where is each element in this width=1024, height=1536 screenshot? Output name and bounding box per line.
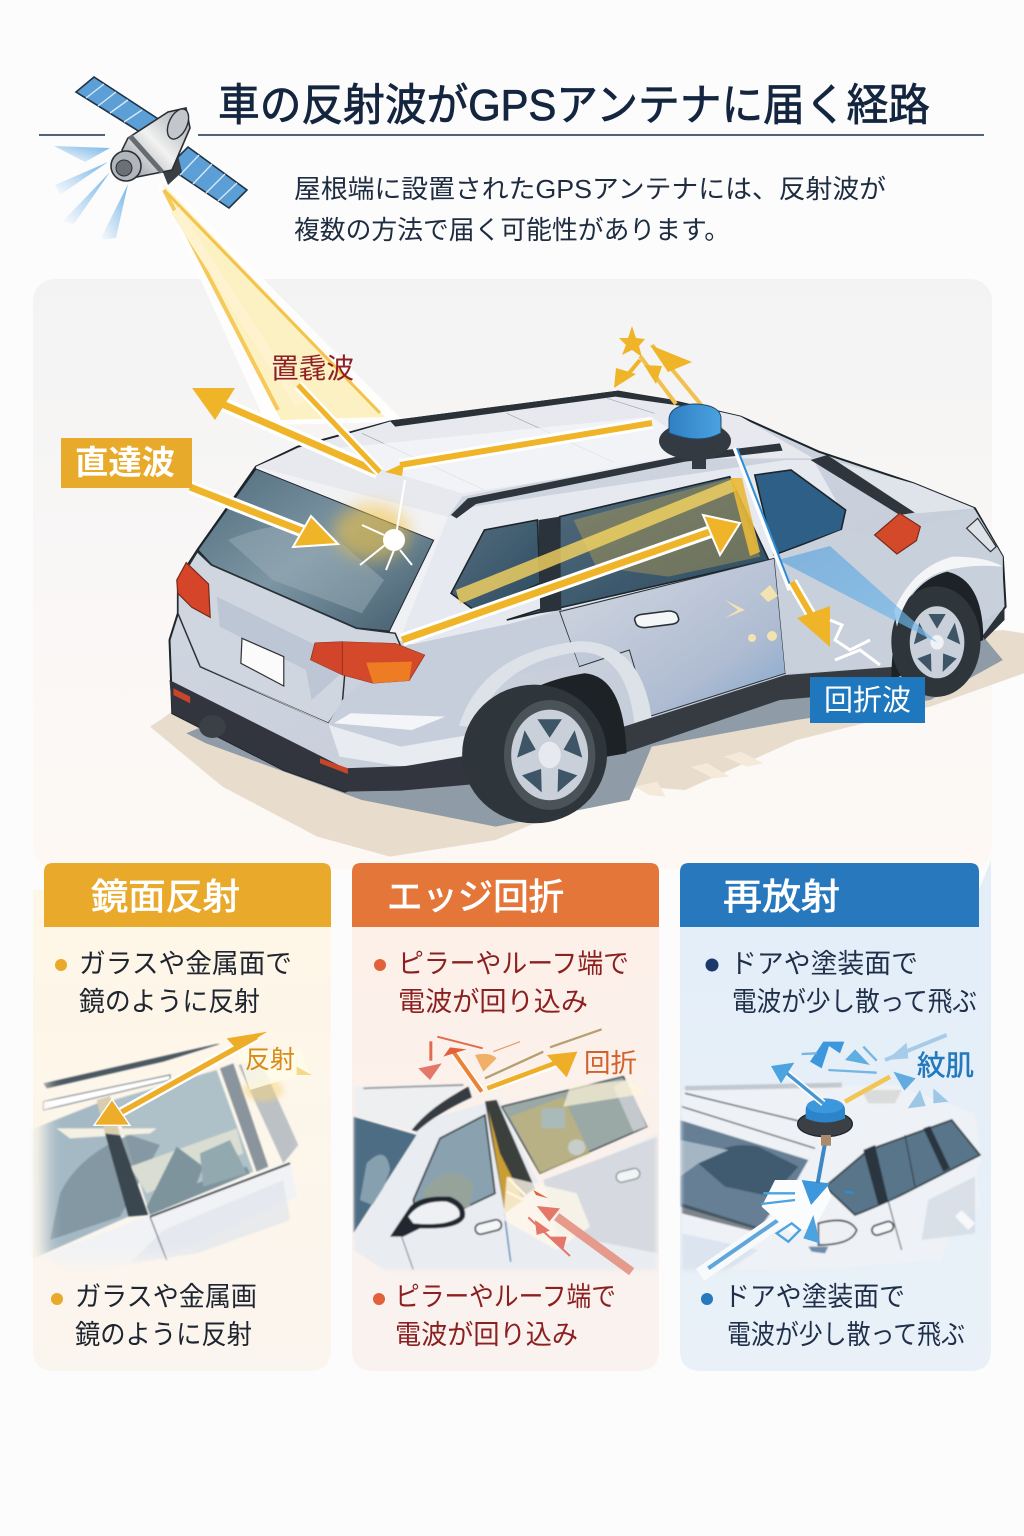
car cast shadow xyxy=(186,633,1003,827)
header rule xyxy=(39,134,984,136)
panel: 鏡面反射 xyxy=(30,863,331,1371)
label: 直達波: 直達波 xyxy=(75,444,175,481)
window: front door xyxy=(755,470,846,555)
rear wheel xyxy=(462,673,627,823)
text: bottom bullet xyxy=(51,1282,257,1350)
rear arch band xyxy=(468,647,643,727)
rear bumper dark xyxy=(170,680,476,792)
car body xyxy=(170,392,1006,792)
door panel xyxy=(560,558,785,717)
header: 再放射: 再放射 xyxy=(723,876,840,917)
front wheel xyxy=(891,572,983,697)
arrow: incoming to roof xyxy=(298,385,652,476)
tail light right xyxy=(311,642,425,683)
text: top bullet: ガラスや金属面で xyxy=(79,949,292,979)
roof seams xyxy=(362,398,654,490)
text: top bullet: ピラーやルーフ端で xyxy=(398,949,629,979)
panel: エッジ回折 xyxy=(352,863,659,1371)
arrow: long reflection to front xyxy=(402,515,740,640)
arrow: reflected wave left xyxy=(192,388,378,472)
header: 鏡面反射: 鏡面反射 xyxy=(91,876,240,917)
text: bottom bullet xyxy=(701,1282,965,1350)
text: top bullet: 電波が回り込み xyxy=(398,987,588,1017)
crosswalk marks xyxy=(635,752,763,797)
white roof shine xyxy=(317,417,707,493)
arrow: diffracted to door xyxy=(792,582,830,647)
exhaust xyxy=(199,715,226,738)
diffraction beam blue xyxy=(735,448,938,643)
inset: pillar diffraction xyxy=(353,1077,658,1273)
label: reflected wave red: 置毳波 xyxy=(271,353,354,384)
roof rail near xyxy=(451,443,783,518)
label: 回折: 回折 xyxy=(584,1048,637,1078)
headlight xyxy=(967,518,996,552)
roof xyxy=(256,392,813,517)
front door and fender xyxy=(774,510,1003,673)
roof rail far xyxy=(390,391,730,427)
beam from satellite xyxy=(162,183,392,420)
lower bumper white xyxy=(172,653,479,767)
panel: car illustration background xyxy=(33,279,992,869)
text: top bullet: 電波が少し散って飛ぶ xyxy=(732,987,977,1017)
intro text: 屋根端に設置されたGPSアンテナには、反射波が xyxy=(294,174,886,204)
sparkles near door xyxy=(725,585,880,665)
rear quarter panel xyxy=(328,613,579,767)
door handle xyxy=(633,610,680,629)
arrow: direct wave to window xyxy=(190,487,338,547)
interior reflection xyxy=(228,526,384,613)
rear window xyxy=(197,468,434,632)
tail light left xyxy=(177,563,210,617)
license plate xyxy=(241,638,284,686)
front arch trim xyxy=(894,557,1003,627)
panel: 再放射 xyxy=(680,860,991,1371)
text: top bullet xyxy=(706,949,977,1017)
header: 再放射 xyxy=(680,863,979,927)
arrows and star above antenna xyxy=(614,326,730,440)
icon: satellite xyxy=(54,77,247,240)
inset: window reflection xyxy=(30,1044,298,1273)
window: rear door xyxy=(507,477,769,620)
text: bottom bullet: ドアや塗装面で xyxy=(724,1282,905,1312)
window warm tint xyxy=(574,478,760,577)
header: 鏡面反射 xyxy=(44,863,331,927)
tailgate xyxy=(178,552,401,723)
intro text xyxy=(294,174,886,245)
GPS antenna xyxy=(659,404,731,469)
antenna and scatter arrows xyxy=(700,1035,948,1275)
front lamp xyxy=(875,513,920,554)
text: top bullet: 鏡のように反射 xyxy=(79,987,260,1017)
window band reflection xyxy=(456,478,760,604)
text: bottom bullet: 電波が少し散って飛ぶ xyxy=(727,1320,965,1350)
rear pillar xyxy=(256,467,448,540)
inset: antenna re-radiation xyxy=(680,1085,982,1277)
label: 反射: 反射 xyxy=(245,1046,295,1074)
reflectors xyxy=(173,688,348,774)
text: top bullet: ドアや塗装面で xyxy=(730,949,918,979)
intro text: 複数の方法で届く可能性があります。 xyxy=(294,215,730,245)
label: 直達波 xyxy=(61,438,192,488)
text: bottom bullet: ガラスや金属画 xyxy=(75,1282,257,1312)
text: top bullet xyxy=(55,949,292,1017)
windshield edge xyxy=(811,455,915,515)
side upper frame xyxy=(401,460,841,647)
label: 回折波 xyxy=(810,677,925,723)
title: 車の反射波がGPSアンテナに届く経路 xyxy=(218,81,930,130)
arrow: reflection double-headed xyxy=(94,1032,312,1125)
text: bottom bullet xyxy=(373,1282,616,1350)
header: エッジ回折 xyxy=(352,863,659,927)
label: scattered: 紋肌 xyxy=(917,1050,974,1081)
text: bottom bullet: ピラーやルーフ端で xyxy=(395,1282,616,1312)
label: 回折波: 回折波 xyxy=(824,684,911,717)
rocker xyxy=(624,667,897,753)
arrows: edge diffraction xyxy=(418,1029,632,1272)
glow: mirror reflection on rear window xyxy=(334,480,412,570)
pillar xyxy=(539,517,561,613)
window: rear quarter xyxy=(451,520,540,612)
ground shadow xyxy=(150,630,1024,857)
front bumper dark xyxy=(983,607,1004,640)
header: エッジ回折: エッジ回折 xyxy=(387,876,564,917)
text: bottom bullet: 鏡のように反射 xyxy=(75,1320,252,1350)
car illustration xyxy=(150,391,1024,857)
text: bottom bullet: 電波が回り込み xyxy=(395,1320,578,1350)
text: top bullet xyxy=(374,949,629,1017)
